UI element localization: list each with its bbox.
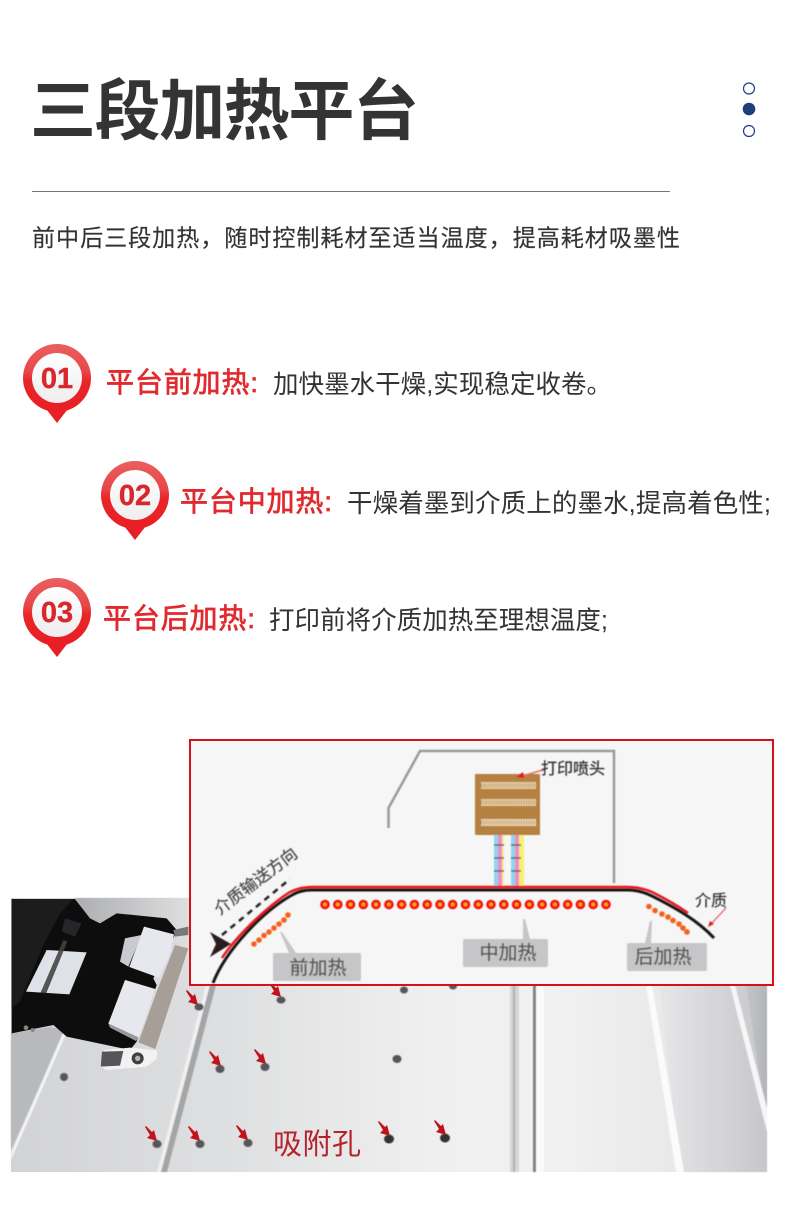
ink streams bbox=[494, 835, 524, 886]
arm to the top right bbox=[173, 927, 188, 937]
vertical channel lines bbox=[510, 985, 519, 1172]
lower-left panel bbox=[11, 1027, 65, 1150]
black housing and bracket bbox=[12, 899, 177, 1050]
subtitle: 前中后三段加热，随时控制耗材至适当温度，提高耗材吸墨性 bbox=[32, 225, 680, 251]
description 02: 干燥着墨到介质上的墨水,提高着色性; bbox=[347, 490, 771, 518]
label: media direction: 介质输送方向 bbox=[211, 844, 301, 919]
label: front heating bbox=[273, 932, 361, 981]
suction hole label: 吸附孔 bbox=[273, 1128, 361, 1161]
label: front heating: 前加热 bbox=[289, 957, 347, 979]
label: middle heating bbox=[463, 919, 548, 967]
label 02: 平台中加热: bbox=[180, 486, 332, 517]
small bolts bbox=[24, 1025, 28, 1030]
label 01: 平台前加热: bbox=[106, 367, 258, 398]
label: middle heating: 中加热 bbox=[479, 942, 537, 964]
item 03: platform rear heating bbox=[23, 578, 608, 657]
label: media with arrow: 介质 bbox=[695, 892, 727, 910]
plate holes bbox=[60, 982, 457, 1148]
hinge block bbox=[62, 918, 82, 937]
icon: pin 02 bbox=[101, 461, 169, 540]
front heater dots bbox=[251, 912, 291, 947]
white rollers bbox=[129, 927, 174, 978]
print head bbox=[475, 774, 540, 835]
icon: pin 01 bbox=[23, 344, 91, 423]
description 03: 打印前将介质加热至理想温度; bbox=[269, 607, 608, 635]
charcoal cover bbox=[12, 899, 73, 1008]
media path: black and red curves bbox=[213, 887, 714, 983]
rear heater dots bbox=[646, 904, 690, 935]
icon: pin 02: 02 bbox=[119, 480, 151, 512]
plate seam bbox=[158, 985, 216, 1172]
item 01: platform front heating bbox=[23, 344, 612, 423]
right panels bbox=[650, 898, 767, 1172]
icon: pin 03: 03 bbox=[41, 597, 73, 629]
direction arrow bbox=[210, 879, 290, 957]
label: print head with arrow: 打印喷头 bbox=[541, 760, 605, 778]
icon: pin 03 bbox=[23, 578, 91, 657]
diagram: heating zones inset bbox=[190, 740, 773, 985]
roller assembly traced from the photo bbox=[12, 899, 188, 1070]
description 01: 加快墨水干燥,实现稳定收卷。 bbox=[273, 371, 612, 399]
metal cut-out bbox=[100, 1048, 157, 1070]
printer cover outline bbox=[388, 751, 614, 883]
icon: three page dots bbox=[743, 83, 755, 136]
icon: pin 01: 01 bbox=[41, 363, 73, 395]
label: print head with arrow bbox=[516, 760, 605, 778]
photo: platform with suction holes bbox=[11, 898, 767, 1172]
middle heater dots bbox=[320, 900, 611, 909]
item 02: platform middle heating bbox=[101, 461, 771, 540]
top strip behind the bracket bbox=[75, 898, 190, 960]
suction hole arrows bbox=[145, 982, 446, 1141]
window bbox=[26, 950, 87, 994]
upper roller recess bbox=[120, 935, 142, 967]
label: media with arrow bbox=[695, 892, 727, 927]
title: 三段加热平台 bbox=[30, 74, 419, 148]
label: rear heating: 后加热 bbox=[634, 946, 692, 968]
brown felt roller bbox=[138, 945, 188, 1049]
label 03: 平台后加热: bbox=[103, 603, 255, 634]
label: rear heating bbox=[627, 921, 707, 971]
